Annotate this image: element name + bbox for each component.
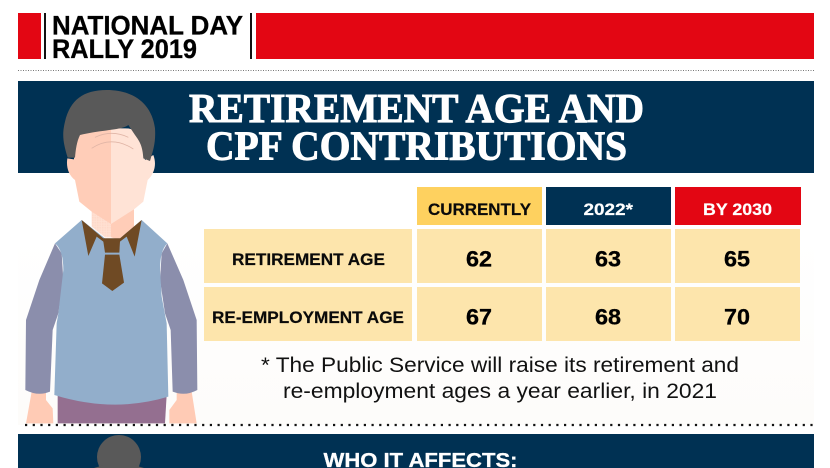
hands [26, 392, 197, 423]
row: re-employment age: 70 [724, 304, 750, 330]
collar [82, 220, 142, 257]
vest [54, 220, 168, 405]
column headers: CURRENTLY [428, 201, 531, 219]
row: retirement age [204, 229, 800, 283]
tie [102, 238, 124, 291]
row: re-employment age: 68 [595, 304, 621, 330]
column headers: 2022* [584, 201, 634, 219]
trousers [58, 395, 167, 423]
neck [92, 208, 134, 240]
title: CPF CONTRIBUTIONS [206, 122, 627, 168]
hair [63, 90, 155, 161]
comparison table [204, 187, 801, 341]
footnote [261, 354, 739, 403]
header banner [18, 10, 814, 64]
red block left [18, 13, 41, 59]
row: retirement age: 65 [724, 246, 750, 272]
row: re-employment age: 67 [466, 304, 492, 330]
title: RETIREMENT AGE AND [189, 85, 644, 131]
column headers: BY 2030 [703, 201, 772, 219]
header divider right [250, 13, 252, 59]
content background [18, 173, 814, 425]
footnote: re-employment ages a year earlier, in 2021 [283, 380, 717, 403]
title [189, 85, 644, 168]
column headers [417, 187, 801, 225]
figure: man in vest and tie [25, 90, 197, 423]
red bar right [256, 13, 814, 59]
title panel [18, 81, 814, 173]
row: retirement age: 62 [466, 246, 492, 272]
footnote: * The Public Service will raise its retirement and [261, 354, 739, 377]
header title [52, 10, 243, 64]
row: retirement age: RETIREMENT AGE [232, 251, 385, 269]
icon: person silhouette [94, 435, 144, 468]
header title: NATIONAL DAY [52, 10, 243, 40]
row: re-employment age: RE-EMPLOYMENT AGE [212, 309, 404, 327]
bottom panel: who it affects [18, 434, 814, 468]
sleeves [25, 243, 197, 394]
row: retirement age: 63 [595, 246, 621, 272]
row: re-employment age [204, 287, 800, 341]
header title: RALLY 2019 [52, 34, 197, 64]
face [67, 127, 155, 224]
header divider left [44, 13, 46, 59]
